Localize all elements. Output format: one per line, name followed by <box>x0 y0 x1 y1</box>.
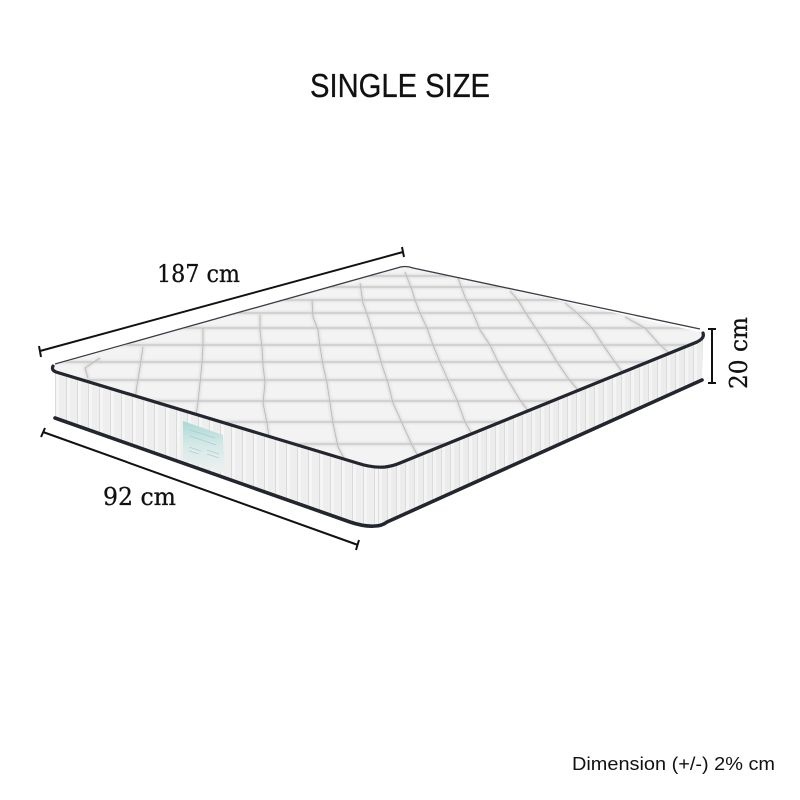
quilt stitching shadows <box>40 272 720 460</box>
quilt stitching lines <box>40 272 720 460</box>
dimension arrow: height 20 cm <box>708 329 716 383</box>
label: 20 cm: 20 cm <box>725 317 753 389</box>
mattress right side panel <box>378 336 703 526</box>
label: 92 cm: 92 cm <box>103 483 176 511</box>
mattress left side panel <box>55 372 378 526</box>
mattress product label <box>183 421 225 473</box>
top front piping <box>52 333 703 467</box>
back edge piping <box>55 266 700 364</box>
mattress quilted top surface <box>40 266 720 466</box>
dimension arrow: length 187 cm <box>39 247 404 357</box>
label: 187 cm: 187 cm <box>157 260 240 288</box>
footnote: dimension tolerance: Dimension (+/-) 2% cm <box>572 754 775 774</box>
bottom piping <box>55 380 702 526</box>
title: SINGLE SIZE <box>310 67 490 104</box>
dimension arrow: width 92 cm <box>41 428 359 550</box>
mattress illustration <box>40 266 720 526</box>
